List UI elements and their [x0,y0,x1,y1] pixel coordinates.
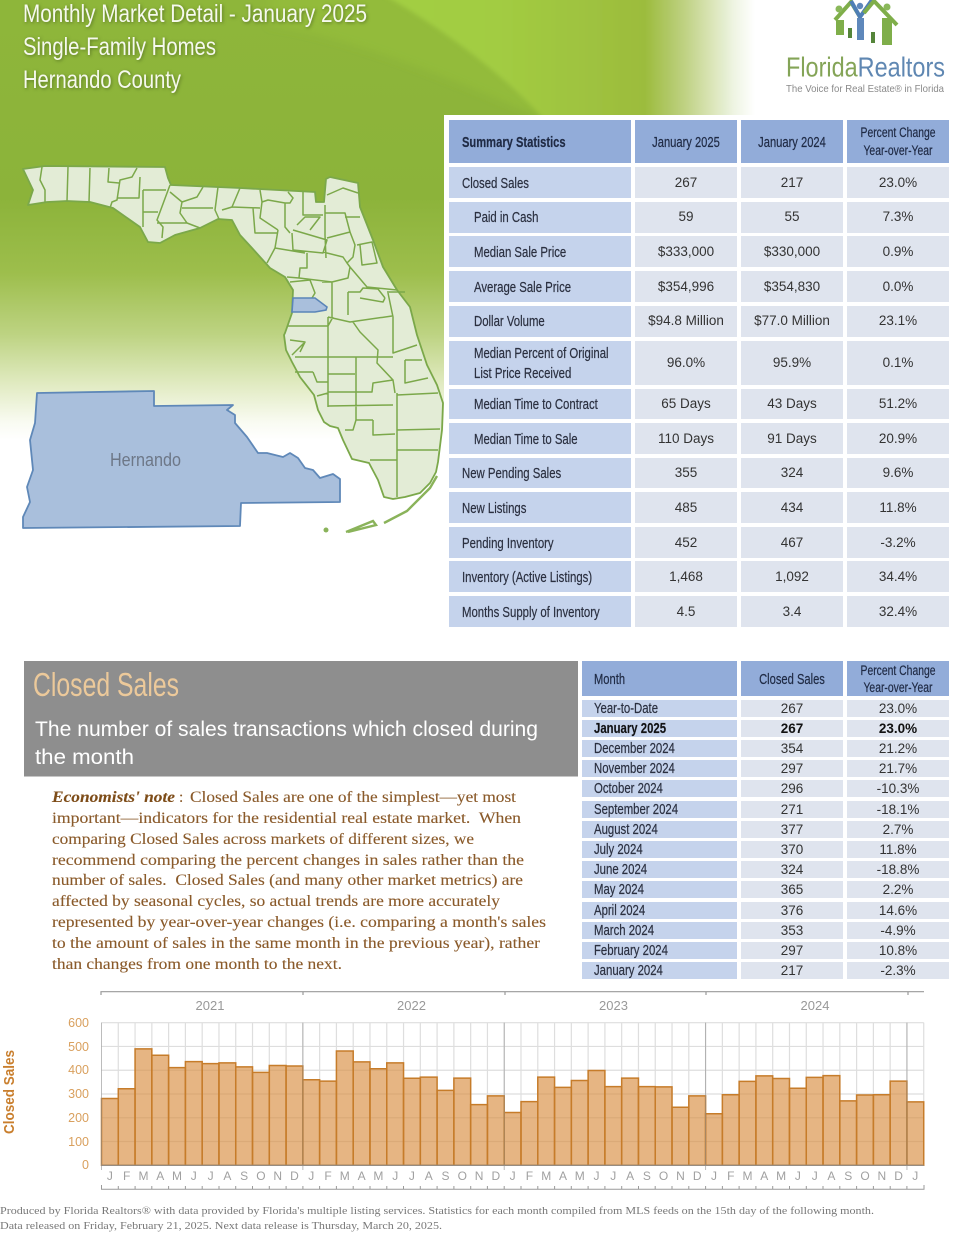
row: new listings: New Listings [462,500,527,516]
row: dollar volume: $77.0 Million [754,313,830,328]
row: february 2024: 10.8% [879,943,917,958]
row: january 2024: 217 [781,963,803,978]
y axis values: 300 [68,1087,89,1101]
row: year-to-date: 23.0% [879,701,917,716]
row: closed sales: 23.0% [879,175,917,190]
row: april 2024: April 2024 [594,902,645,918]
row: inventory active listings: 1,092 [775,569,809,584]
row: average sale price: $354,996 [658,279,714,294]
row: july 2024: 11.8% [879,842,917,857]
row: december 2024: 21.2% [879,741,917,756]
Hernando county enlarged shape [23,391,340,528]
row: median sale price: $330,000 [764,244,820,259]
table header: Year-over-Year [863,143,933,158]
footer source note: Data released on Friday, February 21, 2025. Next data release is Thursday, March 20, 2025. [0,1220,442,1232]
row: pending inventory [449,527,949,558]
month row backgrounds [582,700,949,979]
row: new listings: 485 [675,500,697,515]
row: median time to sale: 110 Days [658,431,714,446]
Florida Realtors logo [786,0,945,95]
section description [35,718,538,769]
title: Single-Family Homes [23,33,216,61]
panel: closed sales heading [24,661,578,776]
economists note: comparing Closed Sales across markets of different sizes, we [52,831,474,848]
county boundaries [40,167,440,497]
year bracket and labels: 2024 [801,998,829,1013]
row: february 2024: February 2024 [594,942,668,958]
economists note: Economists' note [51,789,175,806]
row: inventory active listings: 1,468 [669,569,703,584]
y axis values: 600 [68,1016,89,1030]
row: closed sales: 217 [781,175,803,190]
Hernando locator highlight [292,298,327,312]
row: months supply of inventory: 32.4% [879,604,917,619]
row: february 2024: 297 [781,943,803,958]
row: new listings: 11.8% [879,500,917,515]
economists note: Closed Sales are one of the simplest—yet most [190,789,517,806]
row: pending inventory: Pending Inventory [462,535,554,551]
economists note: recommend comparing the percent changes in sales rather than the [52,852,524,869]
row: median time to contract: 65 Days [661,396,711,411]
year bracket and labels: 2023 [599,998,628,1013]
row: november 2024: 21.7% [879,761,917,776]
bar chart: closed sales by month [1,992,924,1189]
row: dollar volume [449,306,949,337]
row: months supply of inventory: 3.4 [783,604,802,619]
y axis values: 0 [82,1158,89,1172]
Florida county map [23,166,443,532]
row: may 2024: 365 [781,882,803,897]
table header: Percent Change [861,125,936,140]
row: median time to contract: Median Time to Contract [474,396,598,412]
economists note: number of sales. Closed Sales (and many other market metrics) are [52,872,523,889]
row: median percent of original list price [449,341,949,385]
month table header: Percent Change [861,663,936,678]
row: average sale price: Average Sale Price [474,279,571,295]
row: closed sales: Closed Sales [462,175,529,191]
section description: The number of sales transactions which closed during [35,718,538,741]
row: new pending sales: New Pending Sales [462,465,562,481]
row: january 2025: 267 [781,721,803,736]
row: november 2024: 297 [781,761,803,776]
row: june 2024 [594,861,919,877]
row: median time to sale: Median Time to Sale [474,431,578,447]
row: inventory active listings: 34.4% [879,569,917,584]
month table header: Closed Sales [759,671,825,687]
row: dollar volume: 23.1% [879,313,917,328]
row: median time to contract [449,389,949,419]
row: median sale price: Median Sale Price [474,244,566,260]
economists note: to the amount of sales in the same month in the previous year), rather [52,935,541,952]
row: may 2024 [594,881,913,897]
state outline [23,166,443,499]
title [23,0,367,94]
title: Hernando County [23,66,181,94]
row: median time to contract: 51.2% [879,396,917,411]
row: new pending sales: 324 [781,465,804,480]
row: inventory active listings: Inventory (Active Listings) [462,569,592,585]
row: months supply of inventory: Months Supply of Inventory [462,604,600,620]
month axis bracket [102,1185,924,1189]
row: pending inventory: -3.2% [880,535,916,550]
plot: grid and bars [102,1023,924,1170]
row: june 2024: 324 [781,862,804,877]
y axis values: 100 [68,1135,89,1149]
row: october 2024: -10.3% [877,781,919,796]
row: november 2024 [594,760,917,776]
month table header: Month [594,671,625,687]
row: average sale price [449,271,949,302]
table header: January 2025 [652,134,720,150]
row: april 2024: 14.6% [879,903,917,918]
row: months supply of inventory [449,596,949,627]
row: august 2024 [594,821,913,837]
row: december 2024: December 2024 [594,740,675,756]
row: april 2024 [594,902,917,918]
row: median sale price: 0.9% [883,244,913,259]
monthly closed sales table [582,661,949,979]
row: year-to-date: 267 [781,701,803,716]
row: inventory active listings [449,561,949,592]
year bracket and labels: 2021 [196,998,224,1013]
county label: Hernando [110,450,181,470]
row: new pending sales: 355 [675,465,697,480]
economists note: important—indicators for the residential real estate market. When [52,810,521,827]
row: september 2024 [594,801,919,817]
row: median percent of original list price: 95.9% [773,355,811,370]
row: average sale price: $354,830 [764,279,820,294]
row: median time to sale [449,423,949,454]
row: paid in cash: 55 [784,209,800,224]
row: pending inventory: 467 [781,535,803,550]
year bracket and labels: 2022 [397,998,426,1013]
month axis labels: JFMAMJJASONDJFMAMJJASONDJFMAMJJASONDJFMAMJJASONDJ [107,1169,918,1183]
row: december 2024: 354 [781,741,804,756]
row: median time to contract: 43 Days [767,396,817,411]
row: october 2024: October 2024 [594,780,663,796]
green header background [0,0,959,440]
row: paid in cash: 59 [678,209,694,224]
row: year-to-date: Year-to-Date [594,700,658,716]
row: median sale price: $333,000 [658,244,714,259]
y axis values: 200 [68,1111,89,1125]
row: june 2024: June 2024 [594,861,647,877]
row: september 2024: September 2024 [594,801,678,817]
economists note: represented by year-over-year changes (i.e. comparing a month's sales [52,914,546,931]
month table header: Year-over-Year [863,680,933,695]
row: paid in cash: 7.3% [883,209,913,224]
row: july 2024: 370 [781,842,803,857]
footer source note: Produced by Florida Realtors® with data provided by Florida's multiple listing services. Statistics for each month compiled from MLS feeds on the 15th day of the following month. [0,1205,874,1217]
icon: house and people logo mark [835,0,897,45]
row: average sale price: 0.0% [883,279,913,294]
row: september 2024: -18.1% [877,802,919,817]
Florida Keys [346,476,437,532]
row: median time to sale: 20.9% [879,431,917,446]
row: new pending sales [449,458,949,488]
row: median time to sale: 91 Days [767,431,817,446]
y axis values: 400 [68,1063,89,1077]
row: pending inventory: 452 [675,535,697,550]
row: dollar volume: $94.8 Million [648,313,724,328]
row: march 2024 [594,922,916,938]
title: Monthly Market Detail - January 2025 [23,0,367,28]
row: months supply of inventory: 4.5 [677,604,695,619]
row: closed sales: 267 [675,175,697,190]
row: median percent of original list price: Median Percent of Original [474,345,609,361]
row: year-to-date [594,700,917,716]
row: median percent of original list price: 0.1% [883,355,913,370]
row: may 2024: May 2024 [594,881,644,897]
summary statistics table [444,115,959,633]
row: new pending sales: 9.6% [883,465,913,480]
row: october 2024 [594,780,919,796]
row: march 2024: March 2024 [594,922,654,938]
row: august 2024: 377 [781,822,803,837]
row: new listings [449,492,949,523]
section heading: Closed Sales [33,666,179,703]
y axis values [68,1016,89,1172]
row: march 2024: -4.9% [880,923,916,938]
economists note: than changes from one month to the next. [52,956,342,973]
year bracket and labels [101,992,924,1013]
economists note: : [179,789,183,806]
row: july 2024 [594,841,917,857]
y axis values: 500 [68,1040,89,1054]
row: january 2025: January 2025 [594,720,666,736]
row: paid in cash: Paid in Cash [474,209,538,225]
y axis title: Closed Sales [1,1050,18,1134]
row: dollar volume: Dollar Volume [474,313,545,329]
row: new listings: 434 [781,500,804,515]
row: january 2024: -2.3% [880,963,916,978]
month table header [582,661,949,696]
row: august 2024: 2.7% [883,822,913,837]
row: november 2024: November 2024 [594,760,675,776]
row: august 2024: August 2024 [594,821,658,837]
economists note: affected by seasonal cycles, so actual trends are more accurately [52,893,500,910]
row: january 2025: 23.0% [879,721,917,736]
row: january 2025 [594,720,917,736]
row: median sale price [449,236,949,267]
row: june 2024: -18.8% [877,862,919,877]
row: january 2024: January 2024 [594,962,663,978]
table header: January 2024 [758,134,826,150]
section description: the month [35,746,134,769]
row: december 2024 [594,740,917,756]
row: paid in cash [449,202,949,233]
row: july 2024: July 2024 [594,841,643,857]
economists note [51,789,546,973]
row: median percent of original list price: List Price Received [474,365,571,381]
row: may 2024: 2.2% [883,882,913,897]
logo wordmark: FloridaRealtors [786,52,945,82]
row: march 2024: 353 [781,923,803,938]
row: median percent of original list price: 96.0% [667,355,705,370]
footer source note [0,1205,874,1232]
logo tagline: The Voice for Real Estate® in Florida [786,83,944,95]
row: april 2024: 376 [781,903,803,918]
row: january 2024 [594,962,916,978]
row: february 2024 [594,942,917,958]
row: september 2024: 271 [781,802,803,817]
table header [449,120,949,163]
table header: Summary Statistics [462,134,566,150]
row: october 2024: 296 [781,781,803,796]
row: closed sales [449,167,949,198]
